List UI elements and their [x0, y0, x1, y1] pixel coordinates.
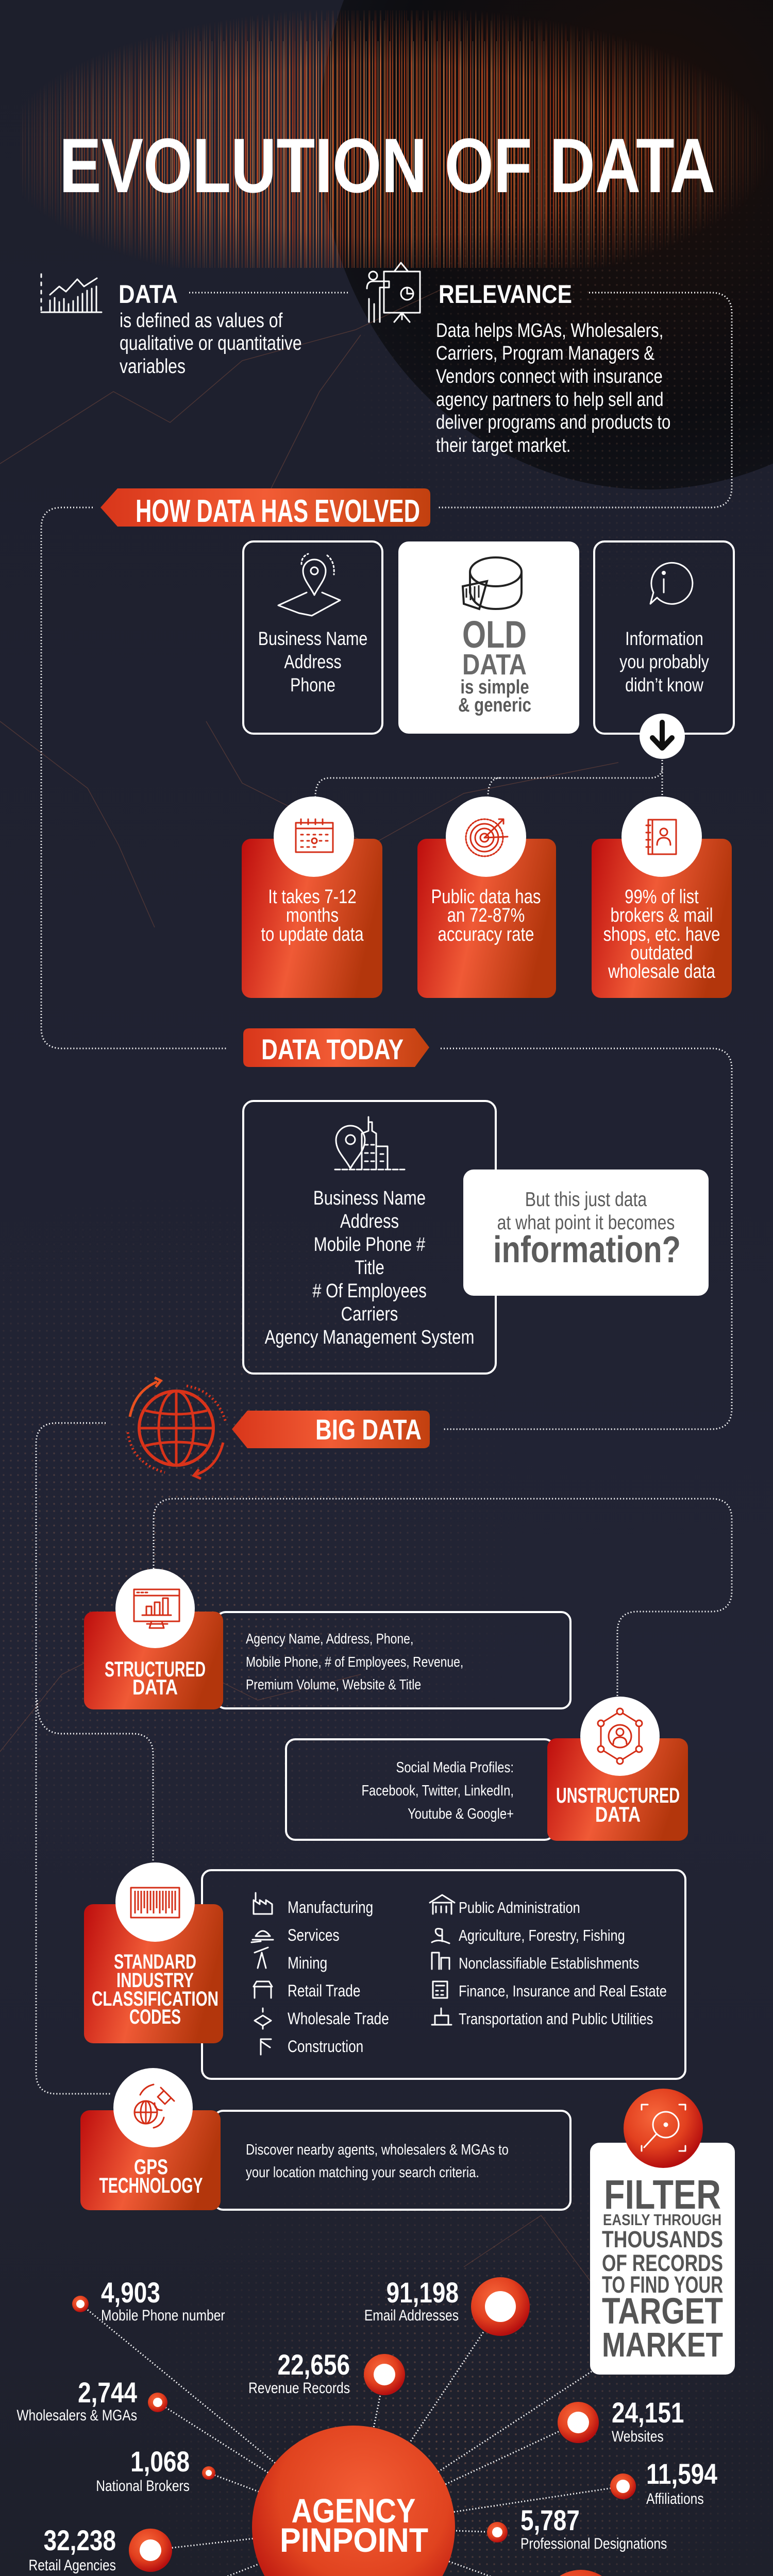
panel: SIC codes: INDUSTRY [116, 1969, 194, 1992]
card: 7-12 months: It takes 7-12 [268, 886, 357, 908]
panel: structured data: Premium Volume, Website & Title [246, 1677, 421, 1693]
text: data definition: variables [120, 355, 186, 378]
panel: filter: OF RECORDS [602, 2250, 723, 2276]
background: dotted globe center [183, 2167, 747, 2572]
list: SIC industries: Wholesale Trade [288, 2010, 389, 2028]
panel: unstructured data [286, 1697, 688, 1841]
stat: 11,594 affiliations: Affiliations [646, 2490, 704, 2507]
box: information you didn't know: you probably [619, 651, 709, 673]
icon: magnifier [642, 2105, 685, 2151]
text: relevance description: their target market. [436, 435, 570, 456]
icon: monitor chart [134, 1589, 179, 1628]
panel: filter [590, 2089, 735, 2375]
panel: structured data: Mobile Phone, # of Employees, Revenue, [246, 1654, 463, 1670]
stat: 4,903 mobile phone: 4,903 [101, 2277, 160, 2309]
list: SIC industries: Transportation and Public Utilities [459, 2010, 653, 2028]
heading: DATA: DATA [119, 280, 178, 309]
dotted connector: structured / unstructured [154, 1499, 732, 1696]
dotted connector: big data left branch [36, 1423, 111, 2094]
stat: 2,744 wholesalers [16, 2377, 167, 2424]
list: SIC industries: Agriculture, Forestry, Fishing [459, 1927, 625, 1945]
list: SIC industries: Nonclassifiable Establishments [459, 1955, 639, 1973]
panel: filter: FILTER [604, 2172, 721, 2217]
icon: network person [598, 1708, 642, 1764]
panel: unstructured data: Youtube & Google+ [408, 1805, 514, 1822]
box: old data fields: Phone [290, 674, 335, 696]
icon: pie [463, 557, 522, 609]
card: 99% of list brokers [592, 796, 732, 998]
box: data today fields: Agency Management System [265, 1327, 474, 1348]
chart: agency pinpoint hub: PINPOINT [280, 2521, 428, 2559]
stat: 2,744 wholesalers: 2,744 [78, 2377, 137, 2409]
panel: structured data [84, 1569, 570, 1709]
stat: 5,787 professional designations: 5,787 [520, 2504, 580, 2536]
list: SIC industries: Public Administration [459, 1899, 580, 1917]
icon: satellite globe [135, 2084, 174, 2128]
stat: 91,198 email: Email Addresses [364, 2307, 459, 2324]
banner: how data has evolved: HOW DATA HAS EVOLVED [136, 494, 420, 529]
box: data today fields: Carriers [341, 1303, 398, 1325]
text: data definition: qualitative or quantitative [120, 332, 302, 354]
box: old data is simple & generic [398, 541, 579, 734]
panel: filter: TARGET [602, 2291, 723, 2332]
box: data today fields: Business Name [313, 1188, 426, 1209]
card: 7-12 months [242, 796, 382, 998]
text: relevance description [436, 320, 670, 456]
icon: data chart [41, 274, 102, 312]
list: SIC industries: Mining [288, 1955, 327, 1973]
dotted connector: data today to big data [441, 1048, 732, 1429]
panel: SIC codes: CODES [129, 2006, 181, 2028]
stat: 91,198 email: 91,198 [386, 2277, 459, 2309]
panel: GPS technology: Discover nearby agents, wholesalers & MGAs to [246, 2141, 509, 2158]
box: data today fields: Title [355, 1257, 384, 1279]
banner: how data has evolved [100, 488, 430, 529]
stat: 4,903 mobile phone [72, 2277, 225, 2324]
icon: info bubble [650, 563, 693, 604]
panel: filter: MARKET [602, 2326, 723, 2364]
callout: data becomes information [463, 1170, 709, 1296]
box: information you didn't know: didn’t know [625, 674, 703, 696]
stat: 11,594 affiliations: 11,594 [646, 2458, 717, 2490]
box: old data fields: Address [284, 651, 342, 673]
banner: big data [232, 1411, 430, 1448]
stat: 24,151 websites [558, 2397, 684, 2445]
stat: 22,656 revenue: Revenue Records [248, 2379, 350, 2397]
background: dark globe top right [320, 0, 773, 489]
panel: filter: TO FIND YOUR [602, 2272, 723, 2298]
card: 7-12 months: months [286, 905, 339, 926]
box: data today fields [243, 1101, 496, 1374]
panel: unstructured data: DATA [595, 1802, 641, 1826]
text: relevance description: Data helps MGAs, Wholesalers, [436, 320, 663, 342]
stat: 32,238 retail agencies: 32,238 [44, 2524, 116, 2556]
text: data definition: is defined as values of [120, 309, 282, 332]
panel: GPS technology [80, 2068, 570, 2210]
icon: calendar [296, 819, 333, 852]
list: SIC industries: Retail Trade [288, 1982, 360, 2001]
card: 99% of list brokers: 99% of list [625, 886, 699, 908]
panel: filter: EASILY THROUGH [603, 2211, 721, 2229]
stat: 4,903 mobile phone: Mobile Phone number [101, 2307, 225, 2324]
chart: agency pinpoint hub: AGENCY [292, 2492, 415, 2530]
icon: map pin [278, 554, 340, 616]
card: public data accuracy: Public data has [431, 886, 541, 908]
box: old data is simple & generic: DATA [462, 648, 527, 681]
dotted connectors: stats to agency pinpoint [78, 2304, 623, 2576]
list: SIC industries: Manufacturing [288, 1899, 373, 1917]
callout: data becomes information: at what point it becomes [497, 1211, 675, 1234]
panel: GPS technology: your location matching your search criteria. [246, 2164, 479, 2181]
panel: SIC codes [84, 1862, 685, 2079]
chart: agency pinpoint hub [252, 2426, 455, 2576]
stat: 24,151 websites: Websites [612, 2428, 664, 2445]
panel: GPS technology: GPS [134, 2155, 168, 2179]
icon: down arrow circle [640, 714, 685, 759]
stat: 2,744 wholesalers: Wholesalers & MGAs [16, 2406, 137, 2424]
panel: SIC codes: CLASSIFICATION [92, 1988, 219, 2010]
stat: 5,787 professional designations [487, 2504, 667, 2552]
stat: 22,656 revenue: 22,656 [278, 2349, 350, 2381]
stat: 32,238 retail agencies: Retail Agencies [28, 2556, 116, 2574]
box: data today fields: Address [340, 1211, 399, 1232]
panel: structured data: DATA [132, 1675, 178, 1699]
panel: unstructured data: UNSTRUCTURED [556, 1783, 680, 1807]
heading: RELEVANCE: RELEVANCE [439, 280, 572, 309]
box: information you didn't know [594, 541, 734, 734]
box: data today fields: # Of Employees [312, 1280, 427, 1302]
icon: pin and buildings [335, 1117, 405, 1170]
stat: 32,238 retail agencies [28, 2524, 172, 2574]
text: data definition [120, 309, 302, 378]
list: SIC industries: Finance, Insurance and Real Estate [459, 1982, 667, 2001]
list: SIC industries: Services [288, 1927, 340, 1945]
stat: 91,198 email [364, 2277, 530, 2336]
dotted connector: relevance to evolved [438, 293, 732, 507]
panel: structured data: STRUCTURED [105, 1657, 206, 1681]
text: relevance description: agency partners to help sell and [436, 389, 664, 411]
icon: red globe [128, 1378, 226, 1479]
banner: data today: DATA TODAY [261, 1033, 404, 1065]
box: data today fields: Mobile Phone # [314, 1234, 426, 1256]
card: 99% of list brokers: shops, etc. have [603, 924, 720, 945]
callout: data becomes information: information? [493, 1229, 681, 1270]
dotted connector: data line [189, 292, 348, 294]
box: old data is simple & generic: OLD [462, 613, 527, 656]
icon: target [466, 819, 508, 856]
list: SIC industries: Construction [288, 2038, 363, 2056]
box: old data is simple & generic: & generic [458, 694, 531, 716]
background: dotted globe left [3, 1244, 473, 1851]
card: public data accuracy: an 72-87% [447, 905, 525, 926]
box: old data fields [243, 541, 382, 734]
dotted connector: left to data today [41, 507, 227, 1048]
panel: GPS technology: TECHNOLOGY [99, 2173, 203, 2197]
stat: 24,151 websites: 24,151 [612, 2397, 684, 2429]
panel: structured data: Agency Name, Address, Phone, [246, 1631, 413, 1647]
stat: 1,068 national brokers: National Brokers [96, 2477, 190, 2495]
icon: barcode [131, 1888, 179, 1918]
header streaks [21, 10, 773, 268]
background: network lines [0, 289, 721, 2370]
text: relevance description: deliver programs and products to [436, 412, 670, 433]
stat: 1,068 national brokers: 1,068 [130, 2446, 190, 2478]
box: information you didn't know: Information [625, 628, 703, 650]
card: 99% of list brokers: wholesale data [608, 961, 716, 982]
text: relevance description: Carriers, Program Managers & [436, 343, 654, 364]
stat: 127,637 titles [542, 2570, 719, 2576]
card: public data accuracy: accuracy rate [438, 924, 534, 945]
box: old data is simple & generic: is simple [460, 676, 529, 698]
icon: address book [646, 820, 676, 854]
card: 99% of list brokers: outdated [630, 942, 693, 964]
text: relevance description: Vendors connect with insurance [436, 366, 663, 387]
card: public data accuracy [417, 796, 556, 998]
box: old data fields: Business Name [258, 628, 367, 650]
stat: 5,787 professional designations: Professional Designations [520, 2535, 667, 2552]
panel: unstructured data: Facebook, Twitter, LinkedIn, [362, 1782, 514, 1799]
stat: 1,068 national brokers [96, 2446, 215, 2495]
card: 7-12 months: to update data [261, 924, 364, 945]
card: 99% of list brokers: brokers & mail [610, 905, 713, 926]
dotted connector: SIC branch [37, 1700, 153, 1862]
panel: SIC codes: STANDARD [114, 1951, 196, 1973]
stat: 22,656 revenue [248, 2349, 405, 2397]
icon: relevance presenter [367, 263, 420, 322]
list: SIC industries [251, 1893, 667, 2056]
stat: 11,594 affiliations [610, 2458, 717, 2507]
dotted connector: to fact cards [315, 760, 662, 796]
panel: filter: THOUSANDS [602, 2226, 723, 2252]
callout: data becomes information: But this just data [525, 1188, 647, 1211]
panel: unstructured data: Social Media Profiles: [396, 1759, 514, 1776]
banner: big data: BIG DATA [315, 1413, 422, 1446]
